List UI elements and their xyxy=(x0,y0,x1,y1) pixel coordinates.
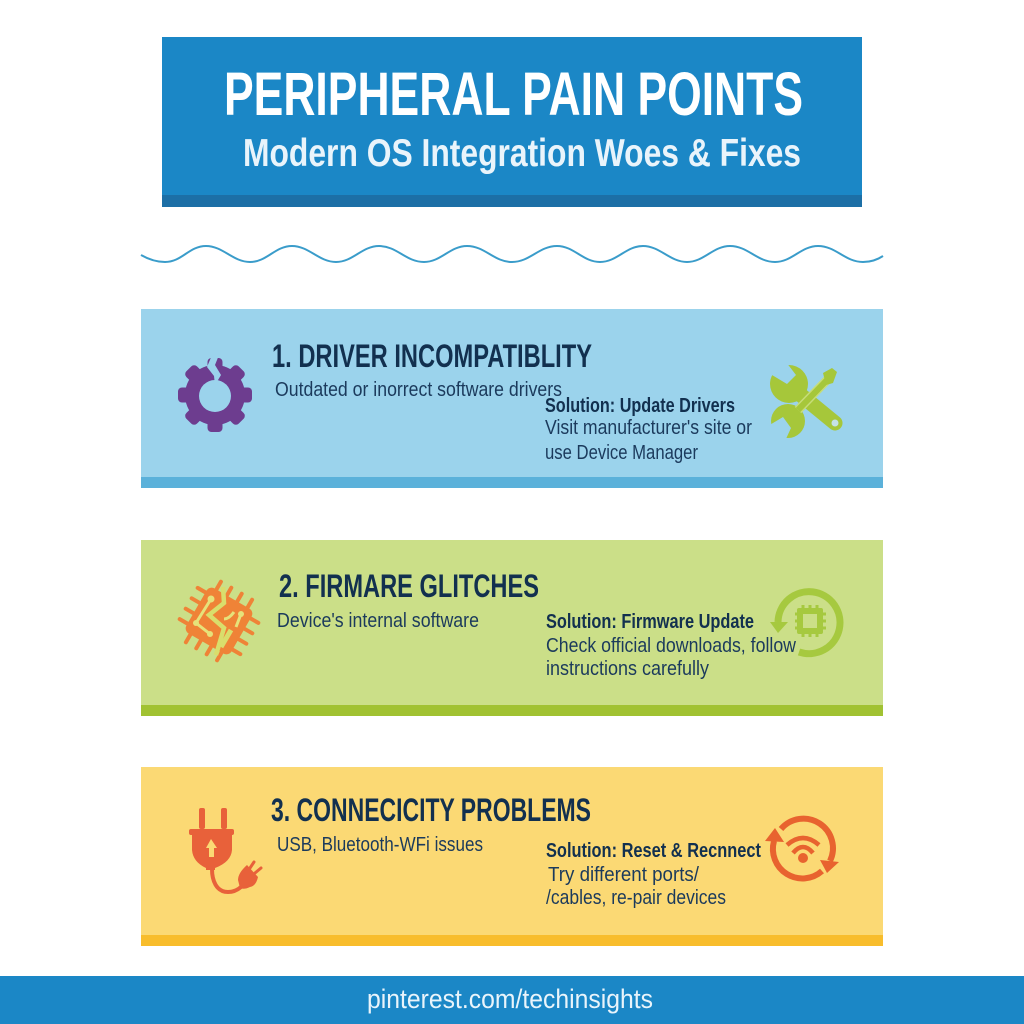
subtitle: Modern OS Integration Woes & Fixes xyxy=(243,132,801,175)
heading: firmware glitches: 2. FIRMARE GLITCHES xyxy=(279,568,539,604)
footer bar xyxy=(0,976,1024,1024)
heading: driver incompatibility: 1. DRIVER INCOMPATIBLITY xyxy=(272,338,592,374)
icon: cracked gear xyxy=(178,355,252,432)
solution: update drivers: Solution: Update Drivers xyxy=(545,395,735,417)
problem text: drivers: Outdated or inorrect software drivers xyxy=(275,378,562,401)
panel: driver incompatibility xyxy=(141,309,883,488)
solution: update drivers: Visit manufacturer's site or xyxy=(545,416,752,439)
icon: glitched chip xyxy=(171,573,267,669)
solution: firmware update xyxy=(546,611,796,680)
solution: firmware update: instructions carefully xyxy=(546,657,710,680)
problem text: firmware: Device's internal software xyxy=(277,609,479,632)
panel: firmware glitches xyxy=(141,540,883,716)
icon: wrench and screwdriver xyxy=(768,362,838,441)
problem text: connectivity: USB, Bluetooth-WFi issues xyxy=(277,833,483,856)
footer text: pinterest.com/techinsights xyxy=(367,984,653,1014)
solution: reset and reconnect: Try different ports/ xyxy=(548,863,699,886)
header banner xyxy=(162,37,862,207)
solution: reset and reconnect xyxy=(546,840,761,909)
title: PERIPHERAL PAIN POINTS xyxy=(224,60,803,128)
panel: connectivity problems xyxy=(141,767,883,946)
solution: firmware update: Solution: Firmware Update xyxy=(546,611,754,633)
heading: connectivity problems: 3. CONNECICITY PROBLEMS xyxy=(271,792,591,828)
solution: update drivers xyxy=(545,395,752,464)
icon: wifi reset xyxy=(765,819,839,878)
icon: firmware update xyxy=(770,592,840,654)
solution: reset and reconnect: /cables, re-pair devices xyxy=(546,886,726,909)
icon: power plug xyxy=(189,808,261,892)
solution: reset and reconnect: Solution: Reset & Recnnect xyxy=(546,840,761,862)
solution: update drivers: use Device Manager xyxy=(545,441,698,464)
solution: firmware update: Check official downloads, follow xyxy=(546,634,796,657)
